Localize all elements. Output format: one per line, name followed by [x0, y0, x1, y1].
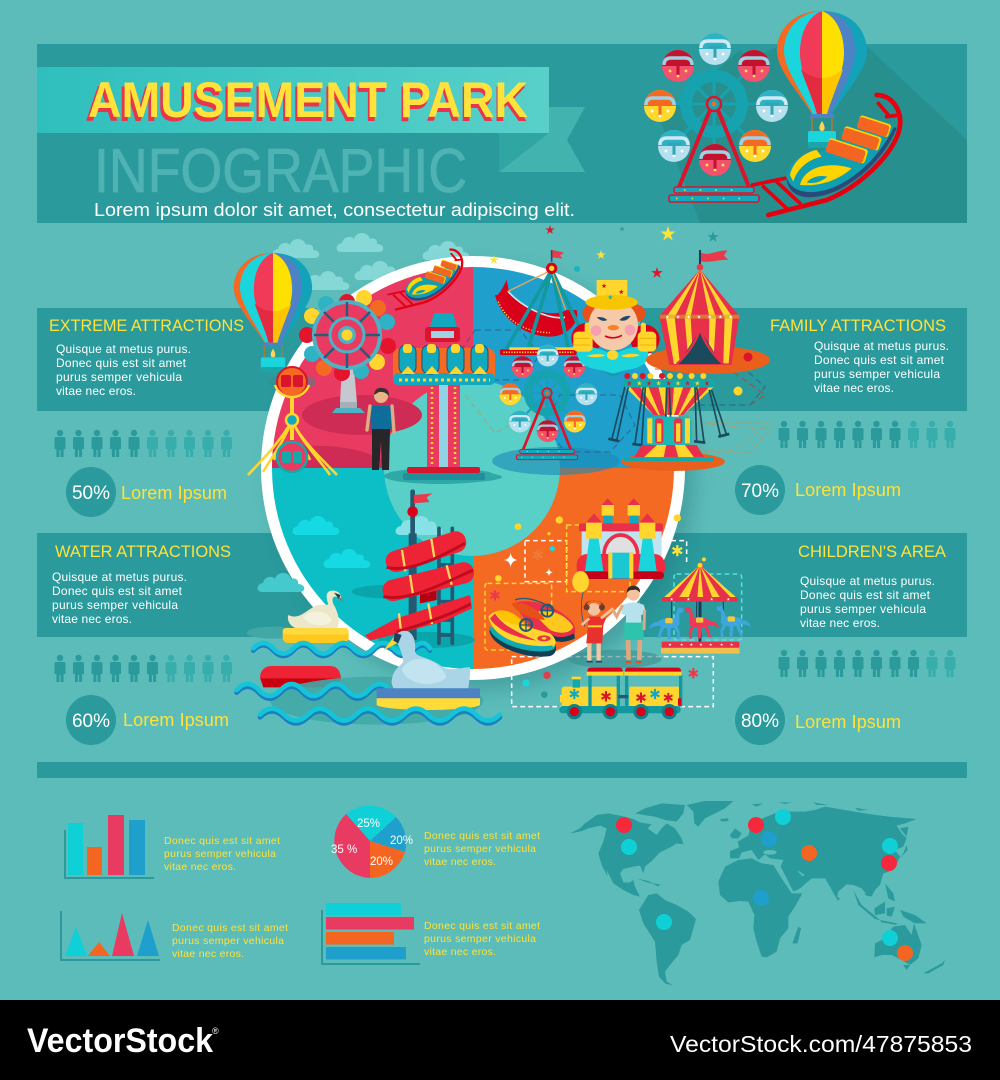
icon: clown — [571, 280, 660, 375]
icon: chain swing ride — [608, 373, 729, 471]
icon: hot air balloon left — [234, 253, 312, 372]
horizontal bar chart caption — [424, 920, 540, 958]
text block: Quisque at metus purus. — [800, 574, 935, 588]
red boat — [260, 666, 341, 687]
text block: Quisque at metus purus. — [814, 339, 949, 353]
icon: bouncy castle — [577, 498, 665, 579]
pie chart caption — [424, 830, 540, 868]
quadrant: water — [272, 468, 473, 669]
triangle chart caption: vitae nec eros. — [172, 948, 244, 960]
heading: FAMILY ATTRACTIONS — [770, 316, 946, 335]
world map — [570, 801, 945, 986]
stat: 70%: 70% — [741, 481, 779, 502]
stat: 80% — [735, 695, 901, 745]
pie chart: 20% — [370, 856, 393, 868]
icon: drop tower — [386, 313, 502, 483]
pie chart: 35 % — [331, 844, 357, 856]
heading: EXTREME ATTRACTIONS — [49, 316, 244, 335]
decorative dots near tent — [734, 352, 752, 396]
icon: pirate ship ride — [495, 250, 582, 355]
triangle chart caption: Donec quis est sit amet — [172, 922, 288, 934]
heading: infographic: INFOGRAPHIC — [94, 137, 467, 206]
figure: man — [367, 388, 394, 470]
dashed hexagons — [458, 330, 770, 470]
text block — [56, 342, 191, 398]
text block: Quisque at metus purus. — [56, 342, 191, 356]
stat: 70%: Lorem Ipsum — [795, 480, 901, 500]
icon: roller coaster car header — [753, 95, 900, 215]
icon: water slide — [352, 492, 476, 648]
pie chart caption: Donec quis est sit amet — [424, 830, 540, 842]
pie chart caption: vitae nec eros. — [424, 856, 496, 868]
pie chart — [331, 806, 413, 878]
stars and dots — [489, 225, 719, 278]
text block: Donec quis est sit amet — [814, 353, 945, 367]
heading: CHILDREN'S AREA — [798, 542, 947, 561]
cloud behind slide — [396, 516, 442, 535]
quadrant: children — [473, 468, 674, 669]
people row: family 70% — [778, 421, 956, 448]
people row: water 60% — [54, 655, 232, 682]
icon: orbit swing ride — [248, 367, 337, 475]
central circle diagram — [261, 256, 695, 690]
horizontal bar chart caption: vitae nec eros. — [424, 946, 496, 958]
text block: vitae nec eros. — [814, 381, 894, 395]
text block: Donec quis est sit amet — [52, 584, 183, 598]
text block: vitae nec eros. — [52, 612, 132, 626]
text block — [814, 339, 949, 395]
panel: extreme attractions — [37, 308, 317, 411]
map markers — [616, 809, 913, 961]
watermark footer: VectorStock.com/47875853 — [670, 1031, 972, 1057]
panel: children's area — [640, 533, 967, 637]
bar chart — [65, 815, 154, 878]
pie chart: 20% — [390, 835, 413, 847]
text block — [52, 570, 187, 626]
pie chart caption: purus semper vehicula — [424, 843, 536, 855]
icon: carousel — [649, 563, 751, 654]
quadrant: family — [473, 267, 674, 468]
triangle chart caption — [172, 922, 288, 960]
icon: bumper cars — [488, 598, 575, 657]
cloud at ring edge — [258, 573, 304, 592]
panel: water attractions — [37, 533, 317, 637]
stat: 80%: Lorem Ipsum — [795, 712, 901, 732]
horizontal bar chart caption: purus semper vehicula — [424, 933, 536, 945]
stat: 50% — [66, 467, 227, 517]
stat: 50%: Lorem Ipsum — [121, 483, 227, 503]
stat: 70% — [735, 465, 901, 515]
text block: vitae nec eros. — [56, 384, 136, 398]
people row: extreme 50% — [54, 430, 232, 457]
stat: 50%: 50% — [72, 483, 110, 504]
stat: 60%: 60% — [72, 711, 110, 732]
stat: 60% — [66, 695, 229, 745]
ribbon with title — [37, 67, 585, 172]
icon: train — [559, 668, 682, 719]
bar chart caption: Donec quis est sit amet — [164, 835, 280, 847]
ribbon with title: AMUSEMENT PARK — [88, 72, 528, 128]
subtitle: Lorem ipsum dolor sit amet, consectetur adipiscing elit. — [94, 199, 575, 220]
divider band — [37, 762, 967, 778]
quadrant: extreme — [272, 267, 473, 468]
dashed frames and decorations in children's area — [485, 514, 742, 707]
stat: 60%: Lorem Ipsum — [123, 710, 229, 730]
watermark footer: ® — [212, 1026, 219, 1036]
clouds outside ring — [273, 233, 469, 290]
watermark footer: VectorStock — [27, 1022, 213, 1060]
text block: vitae nec eros. — [800, 616, 880, 630]
icon: cream swan boat — [247, 591, 349, 643]
icon: circus tent — [659, 250, 739, 365]
triangle chart — [61, 911, 160, 960]
clouds inside water — [293, 516, 370, 568]
text block: purus semper vehicula — [800, 602, 926, 616]
text block: purus semper vehicula — [814, 367, 940, 381]
text block: Quisque at metus purus. — [52, 570, 187, 584]
icon: waves and boats — [237, 643, 483, 725]
icon: ferris wheel header — [644, 33, 788, 202]
icon: hot air balloon header — [777, 11, 867, 148]
icon: small ferris wheel — [499, 345, 597, 460]
text block: purus semper vehicula — [56, 370, 182, 384]
pie chart: 25% — [357, 818, 380, 830]
triangle chart caption: purus semper vehicula — [172, 935, 284, 947]
stat: 80%: 80% — [741, 711, 779, 732]
bar chart caption — [164, 835, 280, 873]
people row: children 80% — [778, 650, 956, 677]
icon: blue swan boat — [260, 631, 500, 723]
center disc — [384, 380, 560, 556]
text block: Donec quis est sit amet — [800, 588, 931, 602]
horizontal bar chart — [322, 903, 420, 964]
horizontal bar chart caption: Donec quis est sit amet — [424, 920, 540, 932]
panel: family attractions — [640, 308, 967, 411]
ribbon with title: AMUSEMENT PARK — [85, 76, 527, 132]
icon: small coaster — [388, 250, 462, 310]
icon: wheel ride extreme — [299, 290, 396, 413]
text block: Donec quis est sit amet — [56, 356, 187, 370]
bar chart caption: purus semper vehicula — [164, 848, 276, 860]
heading: WATER ATTRACTIONS — [55, 542, 231, 561]
header banner — [37, 40, 967, 223]
orange platform under tent — [646, 346, 770, 374]
text block — [800, 574, 935, 630]
watermark footer — [0, 1000, 1000, 1080]
figures: girl and boy — [568, 571, 662, 668]
long shadows in header — [660, 40, 967, 223]
bar chart caption: vitae nec eros. — [164, 861, 236, 873]
text block: purus semper vehicula — [52, 598, 178, 612]
